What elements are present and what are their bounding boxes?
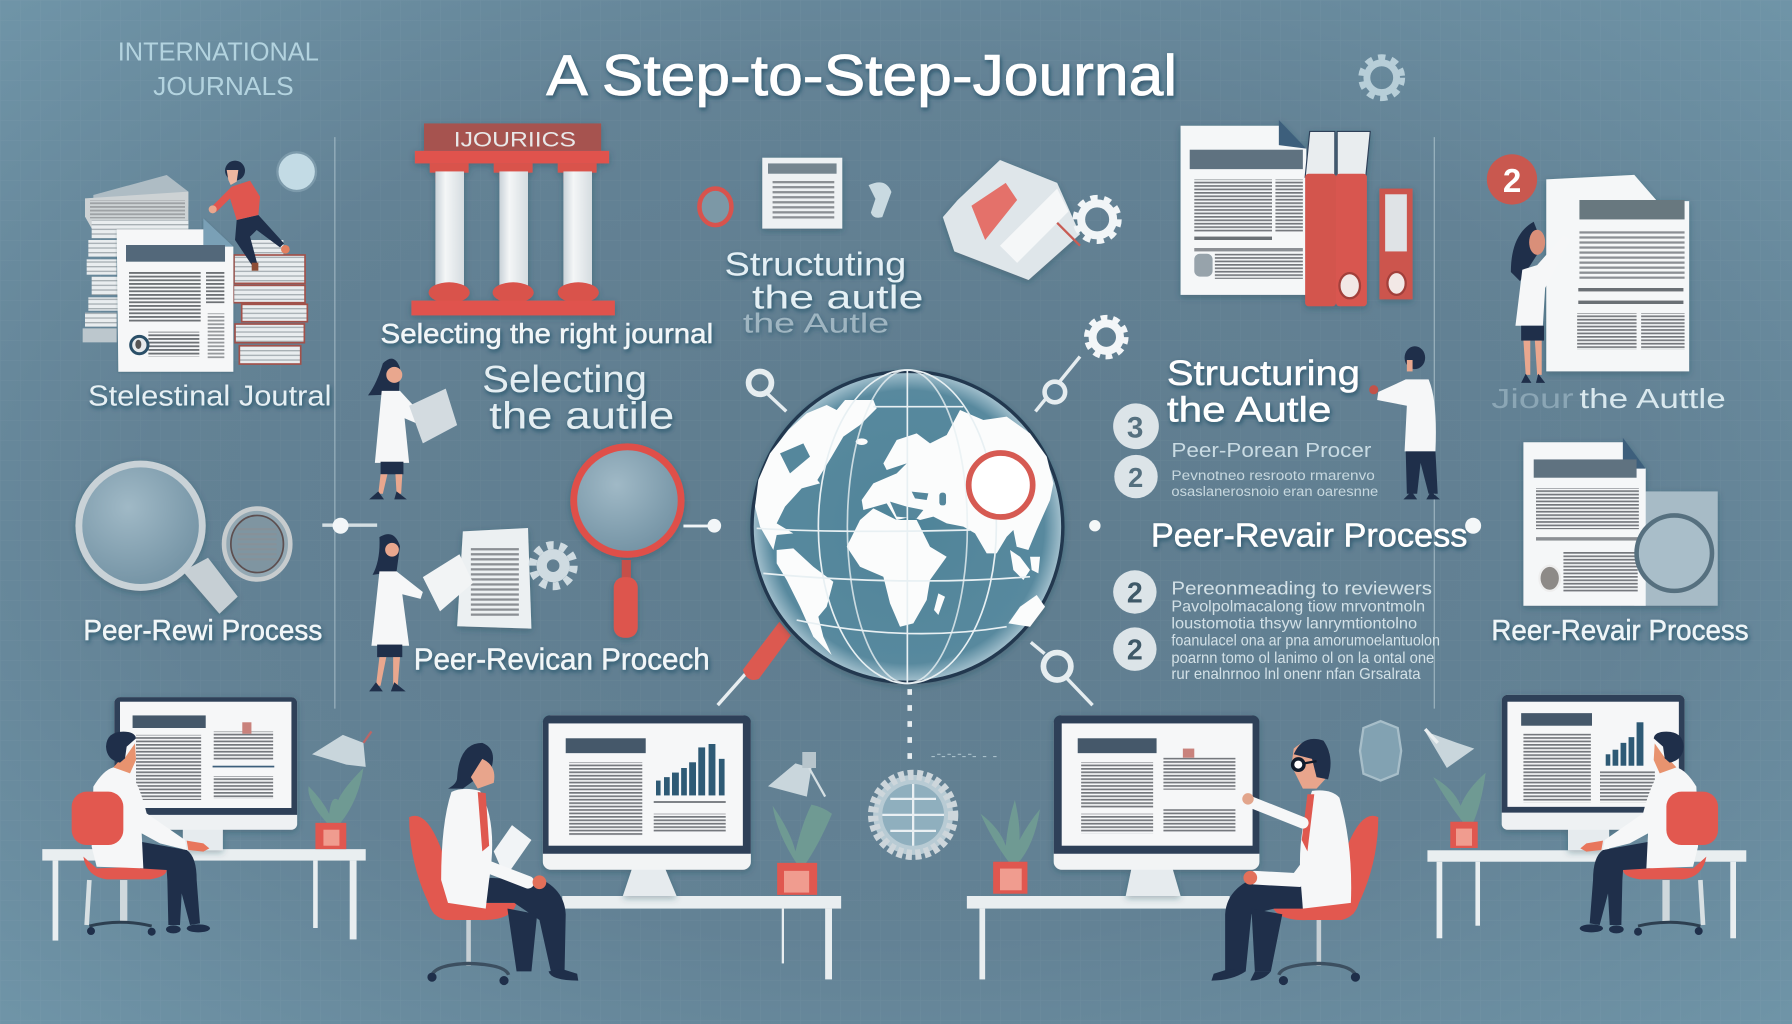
icon: red ring [699, 189, 731, 225]
heading: international journals: JOURNALS [153, 71, 294, 101]
plant [981, 800, 1040, 894]
monitor [543, 715, 751, 896]
desk [42, 849, 366, 941]
figure: woman holding paper [368, 359, 457, 499]
woman writing [1511, 222, 1570, 383]
text: right description: rur enalnrnoo lnl onenr nfan Grsalrata [1171, 666, 1421, 683]
panel: document with loupe [1523, 438, 1718, 606]
icon: journal pillars: IJOURIICS [454, 126, 576, 151]
icon: step badge 2b: 2 [1127, 634, 1143, 666]
icon: step badge 2b [1113, 627, 1157, 671]
seated person [92, 732, 210, 933]
monitor [114, 697, 297, 850]
heading: structuring the autle (top): Structuting [725, 246, 906, 283]
text: right description: poarnn tomo ol lanimo ol on la ontal one [1171, 650, 1434, 667]
icon: step badge 2a: 2 [1127, 577, 1143, 609]
chair [409, 816, 517, 985]
icon: step badge 2: 2 [1128, 462, 1143, 493]
monitor [1054, 715, 1259, 896]
icon: gear with connector [1035, 319, 1125, 411]
desk [967, 896, 1230, 979]
plant [773, 805, 832, 895]
scene: right desk [1425, 695, 1746, 938]
gear [533, 545, 574, 586]
text: small description [1171, 468, 1379, 499]
connector: left dot [322, 518, 377, 534]
desk lamp [1425, 729, 1474, 768]
heading: selecting the autile: the autile [489, 395, 674, 437]
text: right description: Pavolpolmacalong tiow mrvontmoln [1171, 598, 1425, 615]
heading: structuring the autle (top) [725, 246, 923, 339]
heading: international journals: INTERNATIONAL [118, 37, 319, 67]
person and chair [1580, 732, 1718, 936]
chart: world globe [752, 370, 1063, 683]
icon: small document [762, 158, 842, 229]
paper stack [83, 175, 188, 342]
icon: wall clock [277, 152, 316, 191]
text: small description: Pevnotneo resrooto rmarenvo [1171, 468, 1375, 483]
bar chart [1606, 722, 1643, 766]
panel: article with woman writing [1511, 175, 1689, 383]
heading: structuring the autle (top): the Autle [743, 308, 889, 339]
icon: top gear [1362, 58, 1401, 97]
connector: dot right of magnifier [683, 519, 721, 533]
heading: international journals [118, 37, 319, 101]
desk [562, 896, 841, 979]
panel: stacked journals with reader [83, 152, 316, 372]
desk lamp [768, 752, 825, 797]
bar chart [656, 744, 725, 795]
chair base [83, 857, 167, 936]
article page [1546, 175, 1689, 371]
caption: about the autle: Jiour [1491, 383, 1574, 414]
text: right description: Pereonmeading to reviewers [1171, 577, 1432, 598]
connector: dotted line below globe [908, 689, 912, 768]
dots beside globe [931, 754, 1000, 757]
icon: crumpled paper with gear [943, 160, 1118, 280]
panel: article and binders [1181, 120, 1413, 306]
chair base [1623, 857, 1706, 936]
front journal page [117, 218, 233, 372]
text: right description: loustomotia thsyw lanrymtiontolno [1171, 616, 1417, 633]
graticule [757, 370, 1030, 683]
icon: step badge 3: 3 [1127, 412, 1143, 445]
heading: structuring the autle (right): the Autle [1167, 390, 1331, 430]
heading: selecting the autile: Selecting [482, 358, 647, 400]
figure: man with pointer [1369, 346, 1440, 499]
icon: red magnifier [574, 447, 681, 638]
monitor [1502, 695, 1685, 850]
reader climbing books [208, 161, 290, 271]
figure: woman reviewing paper [369, 534, 423, 691]
desk [1427, 850, 1746, 938]
text: right description [1171, 577, 1440, 683]
icon: step badge 2 [1114, 455, 1158, 498]
person and chair [72, 732, 210, 936]
gear [1077, 199, 1118, 240]
heading: structuring the autle (top): the autle [752, 280, 923, 317]
title: A Step-to-Step-Journal [546, 44, 1177, 108]
icon: small white pin [869, 182, 891, 218]
heading: structuring the autle (right): Structuring [1167, 353, 1360, 393]
desk lamp [312, 731, 371, 767]
seated person [1580, 732, 1698, 933]
caption: peer-revican procech: Peer-Revican Procech [414, 642, 710, 677]
plant [308, 768, 363, 849]
caption: about the autle: the Auttle [1579, 383, 1726, 414]
icon: small magnifier lower right [1031, 642, 1093, 705]
scene: centre-right desk [967, 715, 1401, 985]
article page [1181, 120, 1306, 295]
gear badge [1360, 721, 1401, 781]
connector dots [1089, 518, 1481, 534]
chair back [1666, 792, 1718, 845]
continents [755, 400, 1053, 655]
plant [1433, 773, 1486, 848]
heading: structuring the autle (right) [1167, 353, 1360, 430]
icon: large magnifier [79, 464, 238, 614]
text: peer-porean procer: Peer-Porean Procer [1171, 439, 1372, 462]
icon: serrated review document and gear [423, 528, 574, 629]
caption: selecting the right journal: Selecting the right journal [381, 318, 713, 349]
icon: step badge 3 [1113, 403, 1159, 449]
text: right description: foanulacel ona ar pna amorumoelantuolon [1171, 633, 1440, 650]
icon: small magnifier upper left [749, 371, 786, 411]
icon: journal pillars [411, 123, 615, 315]
chair back [72, 792, 123, 845]
caption: peer-rewi process: Peer-Rewi Process [83, 615, 322, 647]
loupe [1637, 515, 1712, 591]
chair [1271, 816, 1378, 985]
text: small description: osaslanerosnoio eran oaresnne [1171, 484, 1379, 499]
book pile [233, 240, 307, 364]
scene: centre-left desk [409, 715, 841, 985]
icon: step badge 2: 2 [1503, 163, 1521, 200]
heading: peer-revair process: Peer-Revair Process [1151, 517, 1467, 554]
icon: step badge 2a [1113, 570, 1157, 614]
binders [1305, 131, 1413, 306]
heading: selecting the autile [482, 358, 674, 437]
icon: small loupe [224, 509, 290, 579]
icon: globe gear [873, 775, 953, 855]
seated person with glasses [1211, 739, 1351, 981]
caption: about the autle [1491, 383, 1726, 414]
scene: left desk [42, 697, 371, 941]
icon: globe red ring [969, 453, 1033, 517]
icon: step badge 2 [1487, 154, 1537, 205]
icon: globe handle [718, 622, 791, 705]
caption: reer-revair process: Reer-Revair Process [1491, 615, 1749, 647]
seated person [441, 743, 578, 981]
caption: left journal: Stelestinal Joutral [88, 381, 331, 413]
inland seas [780, 443, 946, 518]
